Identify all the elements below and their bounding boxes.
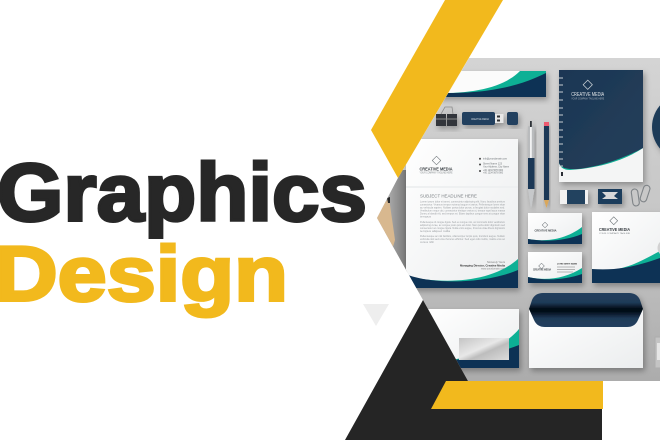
- small card stack edge: [656, 338, 660, 368]
- letterhead contact details: +00 1234 5678 900: [483, 170, 504, 172]
- letterhead signature: [460, 261, 506, 270]
- yellow diagonal chevron: [371, 0, 503, 178]
- letterhead contact details: [479, 158, 510, 174]
- envelope back: [529, 293, 643, 368]
- letterhead body text: Pellentesque ac nisl facilisis, ullamcorper turpis quis, tincidunt augue. Nullam: [420, 235, 505, 238]
- dark angular shape: [345, 300, 602, 440]
- stationery mockup panel: [370, 58, 660, 381]
- letterhead body text: Lorem ipsum dolor sit amet, consectetur adipiscing elit. Nunc faucibus pretium: [420, 200, 505, 204]
- small gray triangle: [363, 304, 389, 326]
- letterhead body text: adipiscing curae, ac congue justo quis est dolor. Nam porta dolor dignissim sed: [420, 224, 506, 227]
- business card front: CREATIVE MEDIA: [534, 228, 557, 232]
- letterhead contact details: Your Address, City Name: [483, 166, 510, 168]
- notebook logo: [571, 80, 605, 100]
- yellow bar: [431, 381, 603, 409]
- letterhead signature: Managing Director, Creative Media: [460, 264, 506, 268]
- shaded strip left of letterhead: [385, 170, 407, 272]
- letterhead subject heading: SUBJECT HEADLINE HERE: [420, 194, 477, 198]
- letterhead contact details: info@yourdomain.com: [483, 158, 507, 160]
- USB drive: [462, 112, 518, 125]
- letterhead body text: [420, 200, 506, 244]
- notebook logo: CREATIVE MEDIA: [571, 92, 605, 98]
- letterhead body text: ac vehicula sapien. Nullam porta dolor purus, a feugiat dolor sodales sed.: [420, 206, 505, 210]
- title: Design: Design: [0, 230, 288, 318]
- top banner: [430, 71, 546, 97]
- round plate: [651, 106, 660, 154]
- pen: [528, 121, 534, 208]
- letterhead body text: consectetur ac congue ligula. Nulla enim augue, rhoncus vitae libero dignissim: [420, 227, 505, 230]
- business card back: [528, 252, 582, 283]
- title: Graphics: Graphics: [0, 148, 367, 238]
- letterhead body text: tempus aliquet nulla: [420, 230, 451, 233]
- letterhead logo: CREATIVE MEDIA: [420, 166, 453, 172]
- pencil: [544, 122, 549, 208]
- notebook logo: YOUR COMPANY TAGLINE HERE: [571, 98, 604, 100]
- letterhead logo: YOUR COMPANY TAGLINE HERE: [420, 172, 453, 174]
- business card front: [528, 213, 582, 244]
- letterhead body text: Pellentesque id congue ligula. Sed eu congue nisi, vel commodo dolor vestibulum: [420, 221, 505, 224]
- letterhead contact details: Street Name 123: [483, 162, 503, 166]
- business card back: CREATIVE MEDIA: [533, 268, 551, 272]
- USB drive: CREATIVE MEDIA: [471, 117, 489, 121]
- letterhead body text: Vestibulum neque dui, consectetur tristique varius ut, tempor eget lacus massa: [420, 210, 506, 212]
- wood texture corner: [377, 200, 395, 246]
- letterhead body text: consectetur. Vivamus tempor euismod augue et varius. Pellentesque lorem vitae: [420, 204, 506, 206]
- eraser: [560, 190, 588, 204]
- envelope front: [425, 309, 519, 368]
- binder clips: [436, 107, 457, 126]
- letterhead contact details: +00 1234 5678 900: [483, 172, 504, 174]
- presentation folder: CREATIVE MEDIA: [599, 227, 631, 232]
- presentation folder: YOUR COMPANY TAGLINE: [599, 232, 631, 235]
- presentation folder: [592, 212, 660, 283]
- paper clips: [631, 184, 651, 206]
- letterhead body text: tempus: [420, 216, 432, 218]
- sharpener: [598, 189, 622, 204]
- business card back: JOHN SMITH NAME: [557, 262, 578, 266]
- envelope flap: [529, 293, 643, 327]
- letterhead: [406, 139, 518, 288]
- envelope window: [459, 338, 509, 360]
- letterhead body text: cursus nibh: [420, 241, 435, 244]
- black object on wood: [387, 197, 390, 203]
- letterhead logo: [420, 156, 453, 174]
- letterhead body text: vehicula nisl sed urna rhoncus efficitur. Sed eget odio mollis, mattis eros ac: [420, 238, 506, 241]
- letterhead signature: Sincerely Yours: [487, 261, 506, 264]
- letterhead signature: www.yourdomain.com: [481, 268, 505, 270]
- spiral binding: [559, 78, 563, 166]
- letterhead body text: Donec a blandit elit, sed tempus mi. Etiam dapibus congue sem at congue vitae: [420, 212, 506, 216]
- notebook: [559, 70, 643, 182]
